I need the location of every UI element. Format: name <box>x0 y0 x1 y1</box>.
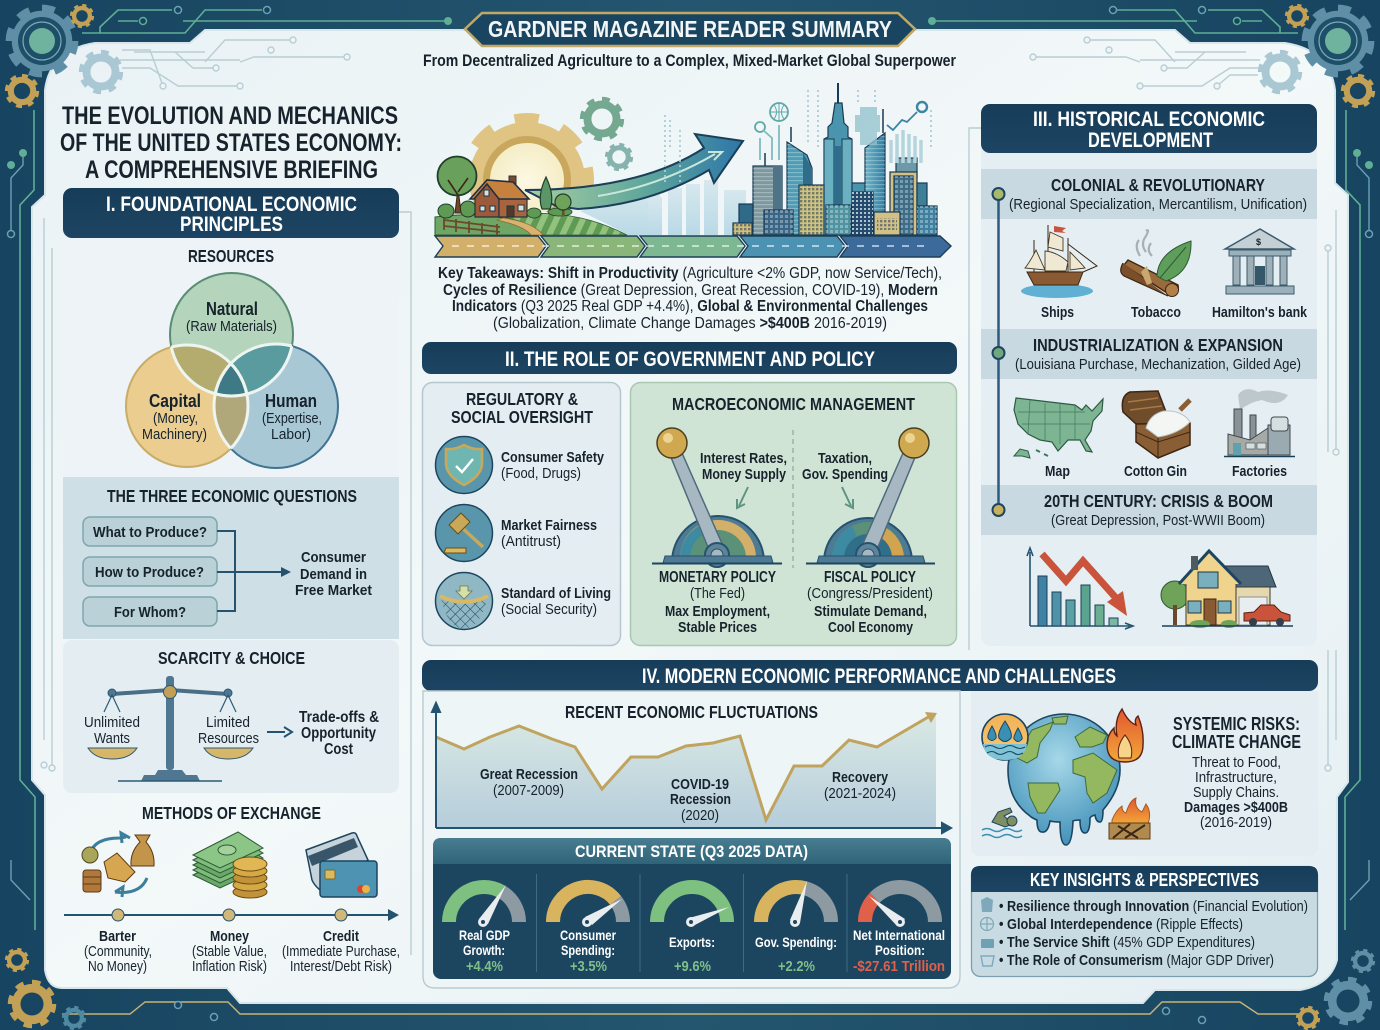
icon: melting globe <box>1008 714 1120 845</box>
panel: foundational economic principles <box>63 188 400 975</box>
icon: swimmer in flood <box>982 808 1022 838</box>
key takeaways: Cycles of Resilience (Great Depression, Great Recession, COVID-19), Modern <box>443 282 938 299</box>
panel: historical economic development: Factories <box>1232 463 1287 480</box>
panel: systemic risks: Supply Chains. <box>1193 785 1279 801</box>
panel: three economic questions: How to Produce? <box>95 564 204 581</box>
icon: US map <box>1014 398 1103 458</box>
panel: key insights and perspectives: KEY INSIGHTS & PERSPECTIVES <box>1030 870 1259 890</box>
icon: burning wood <box>1109 798 1150 839</box>
gauge: consumer spending: Consumer <box>560 927 616 943</box>
icon: credit cards <box>306 833 377 897</box>
arrow: to fiscal lever <box>842 487 853 508</box>
panel: historical economic development: Cotton Gin <box>1124 463 1187 480</box>
corner gears: top right <box>1261 6 1373 106</box>
gauge: net international position <box>853 887 945 975</box>
panel: macroeconomic management: Stable Prices <box>678 619 757 636</box>
panel: regulatory and social oversight: (Antitrust) <box>501 534 561 550</box>
gauge: real GDP growth: +4.4% <box>466 958 503 975</box>
section III heading: III. HISTORICAL ECONOMIC <box>1033 108 1265 131</box>
panel: macroeconomic management: MACROECONOMIC MANAGEMENT <box>672 394 915 414</box>
panel: recent economic fluctuations: Great Recession <box>480 766 578 783</box>
insight list: • Resilience through Innovation (Financial Evolution) <box>999 898 1308 915</box>
gauge: consumer spending: Spending: <box>561 942 615 958</box>
section I heading: I. FOUNDATIONAL ECONOMIC <box>106 193 357 216</box>
icon: bank: $ <box>1256 237 1261 247</box>
city skyline <box>733 83 937 235</box>
panel: regulatory and social oversight: REGULATORY & <box>466 389 578 409</box>
panel: regulatory and social oversight: Consumer Safety <box>501 449 605 466</box>
icon: innovation <box>981 897 993 912</box>
gauge: exports: +9.6% <box>674 958 711 975</box>
icon: money <box>193 832 267 898</box>
panel: regulatory and social oversight <box>422 382 620 646</box>
icon: gavel <box>436 504 492 562</box>
gauge: net international position: Position: <box>875 942 925 958</box>
arrow <box>267 727 292 737</box>
farm scene <box>435 156 627 236</box>
methods of exchange: (Stable Value, <box>192 944 267 960</box>
gauge: exports: Exports: <box>669 934 715 950</box>
panel: scarcity and choice: SCARCITY & CHOICE <box>158 648 305 668</box>
panel: scarcity and choice: Trade-offs & <box>299 709 379 726</box>
gauge: government spending: +2.2% <box>778 958 815 975</box>
gauge: net international position: -$27.61 Trillion <box>853 958 945 975</box>
panel: three economic questions: Consumer <box>301 549 366 566</box>
panel: recent economic fluctuations <box>423 691 960 988</box>
arrow: to monetary lever <box>737 487 748 508</box>
icon: fiscal lever <box>806 428 935 567</box>
panel: recent economic fluctuations: RECENT ECONOMIC FLUCTUATIONS <box>565 702 818 722</box>
panel: systemic risks: Threat to Food, <box>1192 755 1281 771</box>
panel: scarcity and choice: Unlimited <box>84 715 140 731</box>
line chart <box>432 703 951 833</box>
panel: key insights and perspectives <box>971 866 1318 976</box>
section III heading: DEVELOPMENT <box>1088 129 1213 152</box>
panel: macroeconomic management: Max Employment, <box>665 603 770 620</box>
era: industrialization and expansion <box>981 329 1317 379</box>
insight list: • The Role of Consumerism (Major GDP Driver) <box>999 952 1274 969</box>
methods of exchange: (Immediate Purchase, <box>282 944 400 960</box>
panel: systemic risks: CLIMATE CHANGE <box>1172 732 1301 752</box>
icon: cotton gin chest <box>1122 391 1190 458</box>
panel: historical economic development: Ships <box>1041 304 1074 321</box>
insight list: • Global Interdependence (Ripple Effects) <box>999 916 1243 933</box>
panel: macroeconomic management: (Congress/President) <box>807 586 933 602</box>
icon: big gear and sun <box>470 113 594 212</box>
panel: scarcity and choice <box>63 640 399 793</box>
icon: globe <box>980 918 994 930</box>
panel: regulatory and social oversight: SOCIAL OVERSIGHT <box>451 407 593 427</box>
methods of exchange: (Community, <box>84 944 152 960</box>
heading: resources: RESOURCES <box>188 246 274 266</box>
panel: scarcity and choice: Resources <box>198 731 259 747</box>
panel: three economic questions: What to Produce? <box>93 524 207 541</box>
venn diagram: resources <box>126 273 338 468</box>
icon: factories <box>1224 389 1295 456</box>
road chevrons <box>435 236 951 257</box>
icon: flame <box>1107 709 1143 762</box>
panel: systemic risks: SYSTEMIC RISKS: <box>1173 714 1300 734</box>
panel: three economic questions: Demand in <box>300 566 367 583</box>
icon: tobacco <box>1121 230 1191 296</box>
panel: recent economic fluctuations: COVID-19 <box>671 776 729 793</box>
insight list <box>999 898 1308 969</box>
section IV heading: IV. MODERN ECONOMIC PERFORMANCE AND CHALLENGES <box>642 665 1116 688</box>
gauge: consumer spending: +3.5% <box>570 958 607 975</box>
section I heading: PRINCIPLES <box>180 213 283 236</box>
section I heading <box>63 188 399 238</box>
era: industrialization and expansion: INDUSTRIALIZATION & EXPANSION <box>1033 335 1283 355</box>
panel: scarcity and choice: Cost <box>324 741 354 758</box>
panel: systemic risks <box>971 691 1318 856</box>
insight list: • The Service Shift (45% GDP Expenditures) <box>999 934 1255 951</box>
subtitle: From Decentralized Agriculture to a Complex, Mixed-Market Global Superpower <box>423 51 956 70</box>
era: 20th century <box>981 485 1317 535</box>
timeline <box>992 188 1004 516</box>
main title: A COMPREHENSIVE BRIEFING <box>85 156 378 184</box>
gauge: exports <box>657 887 729 975</box>
icon: safety net <box>436 572 492 630</box>
venn diagram: resources: Capital <box>149 391 201 411</box>
panel: regulatory and social oversight: (Food, Drugs) <box>501 466 581 482</box>
icon: bank <box>1225 229 1294 294</box>
panel: three economic questions: THE THREE ECONOMIC QUESTIONS <box>107 486 357 506</box>
panel: historical economic development: Hamilton's bank <box>1212 304 1308 321</box>
icon: briefcase <box>981 939 994 948</box>
timeline: barter to credit <box>64 909 399 921</box>
icon: shield <box>436 436 492 494</box>
panel: recent economic fluctuations: (2007-2009) <box>493 783 564 799</box>
icon: suburban house <box>1161 551 1293 628</box>
section III heading <box>981 104 1317 153</box>
icon: monetary lever <box>652 428 782 567</box>
panel: macroeconomic management: Interest Rates, <box>700 450 787 467</box>
era: colonial and revolutionary: (Regional Specialization, Mercantilism, Unification) <box>1009 197 1307 213</box>
panel: recent economic fluctuations: (2021-2024) <box>824 786 896 802</box>
main title: THE EVOLUTION AND MECHANICS <box>62 102 398 130</box>
corner gears: bottom right <box>1298 951 1373 1028</box>
venn diagram: resources: (Expertise, <box>262 411 322 427</box>
gauge: government spending: Gov. Spending: <box>755 934 837 950</box>
panel: recent economic fluctuations: Recession <box>670 791 731 808</box>
venn diagram: resources: Natural <box>206 299 258 319</box>
panel: macroeconomic management: MONETARY POLICY <box>659 569 777 586</box>
methods of exchange: No Money) <box>88 959 147 975</box>
title banner: GARDNER MAGAZINE READER SUMMARY <box>488 16 892 42</box>
panel: regulatory and social oversight: Market Fairness <box>501 517 597 534</box>
icon: water circle <box>982 714 1028 760</box>
gauge: real GDP growth <box>449 885 519 975</box>
panel: systemic risks: (2016-2019) <box>1200 815 1272 831</box>
pale background towers <box>580 180 746 235</box>
panel: macroeconomic management: Stimulate Demand, <box>814 603 927 620</box>
panel: systemic risks: Damages >$400B <box>1184 800 1288 816</box>
era: 20th century: (Great Depression, Post-WWII Boom) <box>1051 513 1265 529</box>
gauge: real GDP growth: Real GDP <box>459 927 510 943</box>
venn diagram: resources: (Raw Materials) <box>186 319 277 335</box>
panel: macroeconomic management: Cool Economy <box>828 619 914 636</box>
hero illustration: farm to city <box>435 83 951 257</box>
methods of exchange: Interest/Debt Risk) <box>290 959 392 975</box>
methods of exchange: Credit <box>323 928 359 945</box>
dashboard: current state <box>433 838 951 979</box>
methods of exchange: Barter <box>99 928 136 945</box>
icon: ship <box>1021 225 1097 298</box>
icon: declining bar chart <box>1027 548 1133 629</box>
key takeaways: Indicators (Q3 2025 Real GDP +4.4%), Global & Environmental Challenges <box>452 298 928 315</box>
key takeaways <box>438 265 942 332</box>
gauge: consumer spending <box>553 887 623 975</box>
methods of exchange: METHODS OF EXCHANGE <box>142 803 321 823</box>
corner gears: bottom left <box>7 950 84 1028</box>
panel: macroeconomic management: Money Supply <box>702 466 787 483</box>
panel: three economic questions <box>63 477 399 639</box>
panel: historical economic development: Map <box>1045 463 1070 480</box>
panel: scarcity and choice: Wants <box>94 731 130 747</box>
panel: recent economic fluctuations: Recovery <box>832 769 889 786</box>
panel: regulatory and social oversight: (Social Security) <box>501 602 597 618</box>
era: industrialization and expansion: (Louisiana Purchase, Mechanization, Gilded Age) <box>1015 357 1301 373</box>
section II heading: II. THE ROLE OF GOVERNMENT AND POLICY <box>505 348 875 371</box>
era: colonial and revolutionary: COLONIAL & REVOLUTIONARY <box>1051 175 1265 195</box>
panel: three economic questions: For Whom? <box>114 604 186 621</box>
venn diagram: resources: Labor) <box>271 427 311 443</box>
title banner <box>465 13 915 46</box>
gauge: real GDP growth: Growth: <box>463 942 505 958</box>
panel: historical economic development <box>981 104 1317 646</box>
methods of exchange: Money <box>210 928 250 945</box>
methods of exchange: Inflation Risk) <box>192 959 267 975</box>
gauge: net international position: Net International <box>853 927 945 943</box>
main title <box>60 102 402 184</box>
panel: macroeconomic management: FISCAL POLICY <box>824 569 917 586</box>
icon: green gears <box>583 100 631 169</box>
icon: basket <box>981 956 994 966</box>
gauge: government spending <box>755 881 837 975</box>
dashboard: current state: CURRENT STATE (Q3 2025 DATA) <box>575 842 808 861</box>
section II heading <box>422 342 957 374</box>
corner gears: top left <box>7 6 120 106</box>
panel: macroeconomic management <box>630 382 956 646</box>
methods of exchange <box>64 803 400 975</box>
era: colonial and revolutionary <box>981 169 1317 219</box>
venn diagram: resources: Machinery) <box>142 427 207 443</box>
panel: macroeconomic management: (The Fed) <box>690 586 745 602</box>
key takeaways: Key Takeaways: Shift in Productivity (Agriculture <2% GDP, now Service/Tech), <box>438 265 942 282</box>
panel: historical economic development: Tobacco <box>1131 304 1181 321</box>
panel: systemic risks: Infrastructure, <box>1195 770 1277 786</box>
panel: scarcity and choice: Limited <box>206 715 250 731</box>
panel: recent economic fluctuations: (2020) <box>681 808 719 824</box>
tech symbols above city <box>665 90 931 185</box>
panel: three economic questions: Free Market <box>295 582 372 599</box>
main title: OF THE UNITED STATES ECONOMY: <box>60 129 402 157</box>
panel: regulatory and social oversight: Standard of Living <box>501 585 611 602</box>
panel: scarcity and choice: Opportunity <box>301 725 376 742</box>
key takeaways: (Globalization, Climate Change Damages >$400B 2016-2019) <box>493 315 887 332</box>
venn diagram: resources: Human <box>265 391 317 411</box>
icon: growth arrow <box>525 134 743 209</box>
era: 20th century: 20TH CENTURY: CRISIS & BOOM <box>1044 491 1273 511</box>
icon: balance scale <box>88 676 253 781</box>
panel: macroeconomic management: Gov. Spending <box>802 466 888 483</box>
venn diagram: resources: (Money, <box>153 411 198 427</box>
panel: macroeconomic management: Taxation, <box>818 450 872 467</box>
section IV heading <box>422 660 1318 691</box>
icon: barter <box>82 833 154 897</box>
